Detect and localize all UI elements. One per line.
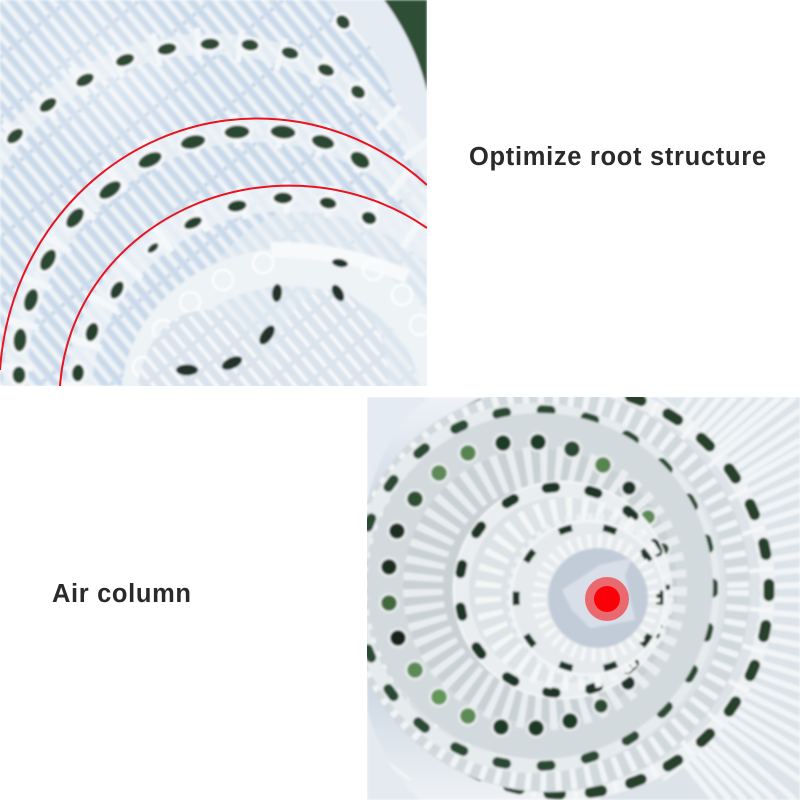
inner ribbed core [138, 257, 388, 386]
red marker: air column [585, 577, 629, 621]
central cone with gear-like teeth [510, 517, 670, 677]
ribbed pot wall [0, 0, 427, 386]
photo: pot interior with central air column [367, 397, 800, 800]
radial ribs inside middle ring [385, 431, 695, 741]
pale lower-right area [216, 211, 427, 386]
red arc: outer [0, 118, 427, 370]
hole band C [65, 182, 426, 386]
outer ring with holes [392, 397, 776, 800]
outer ribs at right [600, 397, 800, 800]
middle ring with oval holes [357, 410, 717, 766]
blurred pot wall: top-left corner [367, 397, 425, 495]
hole band B [2, 112, 427, 386]
inner ring with holes [454, 482, 670, 698]
heading: optimize root structure: Optimize root structure [469, 143, 766, 171]
heading: air column: Air column [52, 580, 191, 608]
photo background [367, 397, 600, 800]
hole band A [0, 12, 426, 180]
photo: pot exterior with root-structure rings [0, 0, 427, 386]
red arc: inner [60, 186, 427, 386]
grey disc with embossed logo [548, 548, 648, 648]
pot rim and dark green background [325, 0, 427, 170]
white ring of small circles [121, 241, 427, 386]
blurred pot wall: bottom-left corner [368, 716, 416, 799]
rib band between rings [358, 400, 738, 780]
ring of round drainage dots [380, 433, 670, 737]
